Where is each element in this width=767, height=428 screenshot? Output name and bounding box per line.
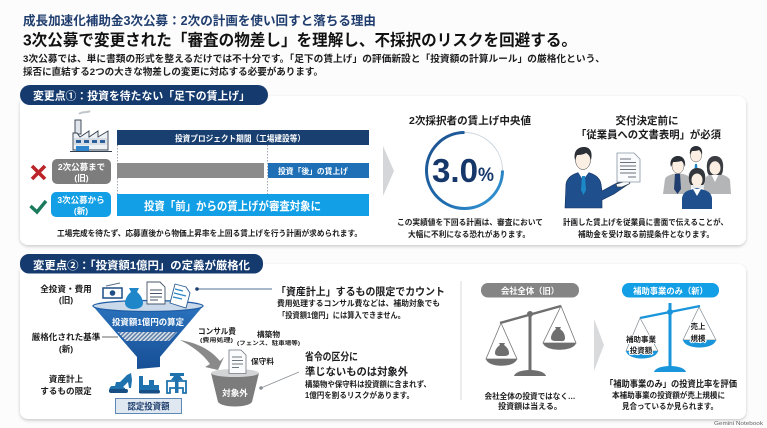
capitalized text: 費用処理するコンサル費などは、補助対象でも <box>277 298 440 308</box>
before-investment bar <box>117 194 369 216</box>
panel: change 1 <box>20 85 746 245</box>
bucket <box>211 369 259 406</box>
written notice heading: 交付決定前に <box>616 114 678 127</box>
header: change 2: 変更点②：「投資額1億円」の定義が厳格化 <box>33 258 250 272</box>
new label: (新) <box>74 206 88 216</box>
subtitle: 成長加速化補助金3次公募：2次の計画を使い回すと落ちる理由 <box>23 13 376 28</box>
header: change 1: 変更点①：投資を待たない「足下の賃上げ」 <box>33 88 250 102</box>
main title: 3次公募で変更された「審査の物差し」を理解し、不採択のリスクを回避する。 <box>23 30 577 50</box>
funnel labels: 全投資・費用 <box>40 283 92 294</box>
old scale caption <box>484 391 576 411</box>
arrow <box>383 146 394 196</box>
icon: papers <box>147 282 190 308</box>
watermark: Gemini Notebook <box>714 421 763 427</box>
new scale: 売上 <box>690 321 706 331</box>
funnel labels: (旧) <box>59 295 73 305</box>
new scale caption: 「補助事業のみ」の投資比率を評価 <box>605 378 737 389</box>
capitalized text: 「投資額1億円」には算入できません。 <box>278 310 405 320</box>
icon: presenter <box>565 147 631 208</box>
old scale label: 会社全体（旧） <box>501 286 559 296</box>
ordinance text: 構築物や保守料は投資額に含まれず、 <box>305 379 431 389</box>
old scale label <box>481 283 579 298</box>
after-investment bar: 投資「後」の賃上げ <box>278 166 348 176</box>
before-investment bar: 投資「前」からの賃上げが審査対象に <box>144 199 321 213</box>
arrow <box>594 319 604 371</box>
panel: change 2 <box>20 254 746 419</box>
project period bar <box>117 130 369 145</box>
icon: check <box>30 201 46 212</box>
timeline caption: 工場完成を待たず、応募直後から物価上昇率を上回る賃上げを行う計画が求められます。 <box>57 228 362 238</box>
old label: (旧) <box>74 173 89 183</box>
arrow: excluded <box>180 340 224 370</box>
icon: employees <box>663 146 731 209</box>
project period bar: 投資プロジェクト期間（工場建設等） <box>175 134 305 144</box>
median ring: % <box>478 165 494 186</box>
funnel labels: 資産計上 <box>49 373 84 384</box>
intro text <box>23 53 605 77</box>
written notice heading: 「従業員への文書表明」が必須 <box>576 128 721 141</box>
icons: equipment <box>109 373 186 394</box>
exclusion labels: (費用処理) <box>200 336 233 344</box>
old scale caption: 投資額は当える。 <box>498 401 562 411</box>
written notice caption <box>563 217 728 239</box>
new label <box>51 192 111 217</box>
exclusion labels <box>198 326 300 366</box>
written notice caption: 補助金を受け取る前提条件となります。 <box>578 229 714 239</box>
ordinance text: 準じないものは対象外 <box>305 365 408 378</box>
median caption: 大幅に不利になる恐れがあります。 <box>408 229 530 239</box>
ordinance text: 省令の区分に <box>305 350 358 363</box>
old label: 2次公募まで <box>58 162 105 172</box>
certified investment box: 認定投資額 <box>128 400 170 412</box>
new scale <box>626 303 716 372</box>
new scale caption: 本補助事業の投資額が売上規模に <box>612 390 725 400</box>
leader line: excluded <box>259 372 299 390</box>
old scale caption: 会社全体の投資ではなく… <box>484 391 576 401</box>
funnel labels: 厳格化された基準 <box>32 331 101 342</box>
exclusion labels: (フェンス、駐車場等) <box>237 339 300 347</box>
median caption: この実績値を下回る計画は、審査において <box>397 217 543 227</box>
bucket: 対象外 <box>222 387 248 398</box>
funnel: 投資額1億円の算定 <box>112 316 184 327</box>
intro text: 3次公募では、単に書類の形式を整えるだけでは不十分です。「足下の賃上げ」の評価新設と「投資額の計算ルール」の厳格化という、 <box>23 53 605 64</box>
new scale: 規模 <box>690 333 706 343</box>
old period bar <box>117 163 264 178</box>
new scale: 補助事業 <box>626 334 656 344</box>
new scale caption <box>605 378 737 411</box>
icon: excluded document <box>229 350 246 374</box>
capitalized text <box>276 285 445 320</box>
icon: document <box>617 153 640 182</box>
icon: factory <box>70 111 112 152</box>
exclusion labels: 構築物 <box>257 329 281 339</box>
median caption <box>397 217 543 239</box>
funnel labels: するもの限定 <box>40 386 92 396</box>
new scale: 投資額 <box>630 345 653 355</box>
median ring <box>426 132 502 208</box>
ordinance text <box>305 350 431 400</box>
exclusion labels: 保守料 <box>251 356 275 366</box>
median heading: 2次採択者の賃上げ中央値 <box>409 114 531 127</box>
old scale <box>486 306 576 376</box>
funnel <box>92 300 204 369</box>
leader line: capitalized <box>195 287 272 291</box>
new scale caption: 見合っているか見られます。 <box>622 401 718 411</box>
header: change 1 <box>20 85 268 105</box>
median ring: 3.0 <box>432 152 478 189</box>
written notice caption: 計画した賃上げを従業員に書面で伝えることが、 <box>563 217 728 227</box>
written notice heading <box>576 114 721 141</box>
ordinance text: 1億円を割るリスクがあります。 <box>305 390 414 400</box>
funnel labels <box>32 283 101 396</box>
exclusion labels: コンサル費 <box>198 326 236 336</box>
icon: cross <box>32 166 45 179</box>
new scale label <box>622 283 719 298</box>
intro text: 採否に直結する2つの大きな物差しの変更に対応する必要があります。 <box>23 66 323 77</box>
funnel labels: (新) <box>59 343 73 354</box>
certified investment box <box>116 398 182 414</box>
new scale label: 補助事業のみ（新） <box>633 286 708 296</box>
header: change 2 <box>20 254 263 274</box>
new label: 3次公募から <box>57 195 105 205</box>
after-investment bar <box>268 163 369 178</box>
old label <box>52 159 111 184</box>
icon: money bag <box>125 288 143 309</box>
icon: money <box>103 283 122 298</box>
capitalized text: 「資産計上」するもの限定でカウント <box>276 285 445 298</box>
